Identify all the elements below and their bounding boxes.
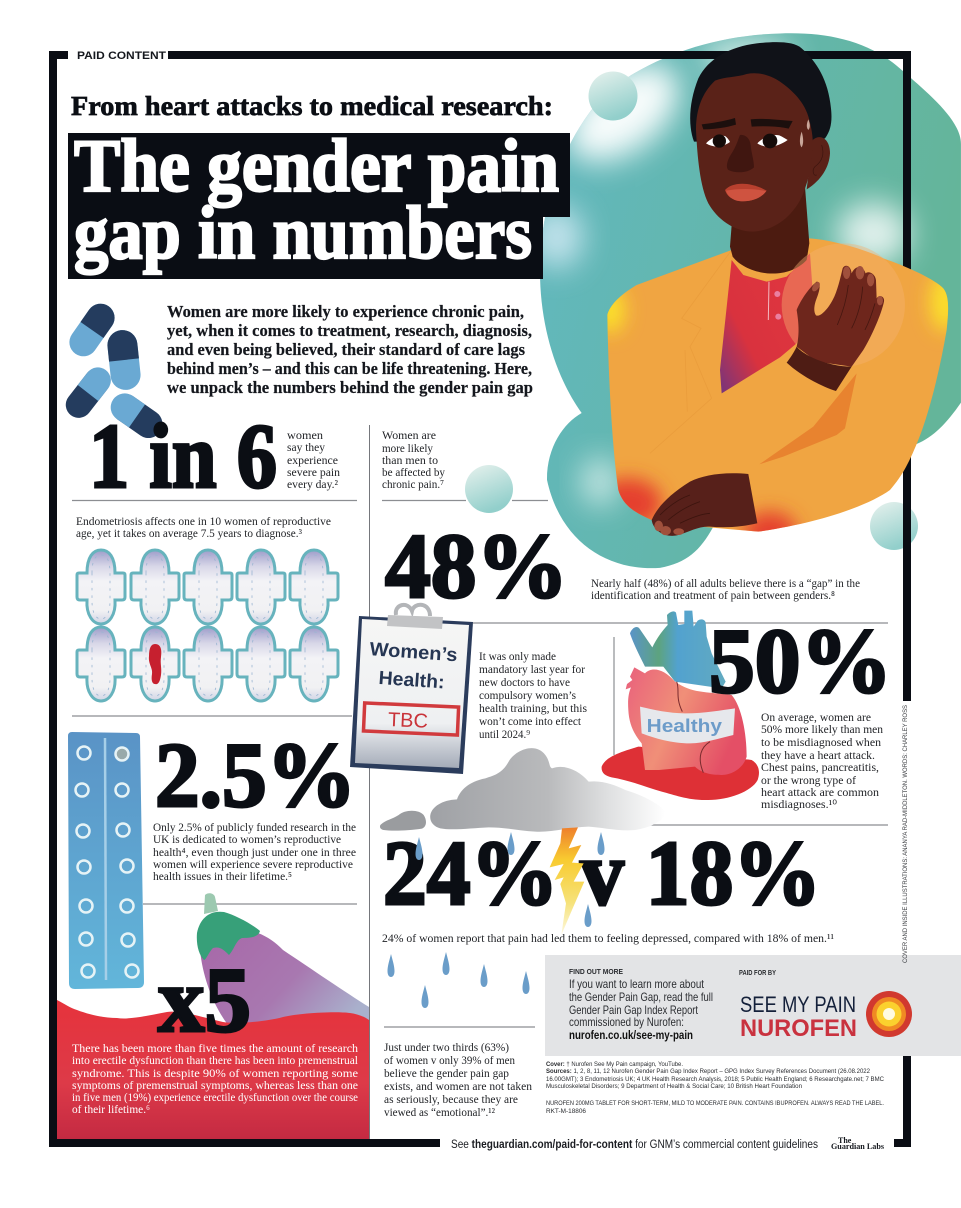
- text: erectile dysfunction research: of their lifetime.⁶: [72, 1104, 150, 1116]
- credit line: COVER AND INSIDE ILLUSTRATIONS: ANANYA RAD-MIDDLETON. WORDS: CHARLEY ROSS: [902, 705, 909, 963]
- find out more: the Gender Pain Gap, read the full: [569, 990, 713, 1004]
- sources: NUROFEN 200MG TABLET FOR SHORT-TERM, MILD TO MODERATE PAIN. CONTAINS IBUPROFEN. ALWAYS READ THE LABEL.: [546, 1100, 884, 1107]
- text: erectile dysfunction research: [72, 1043, 358, 1116]
- text: erectile dysfunction research: into erectile dysfunction than there has been into premenstrual: [72, 1055, 358, 1067]
- text: research funding: UK is dedicated to women’s reproductive: [153, 834, 341, 846]
- sources: [546, 1061, 884, 1115]
- text: mandatory training: until 2024.⁹: [479, 729, 530, 741]
- logo: guardian labs: Guardian Labs: [831, 1141, 885, 1151]
- icon: lightning bolt: [550, 827, 584, 935]
- paid for by: PAID FOR BY: [739, 968, 776, 977]
- text: mandatory training: [479, 651, 588, 741]
- eyes: [706, 135, 788, 147]
- icon: rain drops lower: [388, 952, 530, 1008]
- ear: [807, 137, 830, 189]
- face: [696, 73, 813, 232]
- stat text: women say they: women: [287, 430, 323, 442]
- find out more: Gender Pain Gap Index Report: [569, 1003, 699, 1017]
- icon: clipboard: [350, 605, 473, 774]
- text: nearly half: identification and treatment of pain between genders.⁸: [591, 590, 835, 602]
- text: research funding: health⁴, even though just under one in three: [153, 847, 356, 859]
- footer text: See theguardian.com/paid-for-content for GNM’s commercial content guidelines: [451, 1139, 818, 1151]
- text: research funding: Only 2.5% of publicly funded research in the: [153, 822, 356, 834]
- text: misdiagnosis: they have a heart attack.: [761, 750, 875, 762]
- sources: Sources: 1, 2, 8, 11, 12 Nurofen Gender Pain Gap Index Report – GPG Index Survey References Document (26.08.2022: [546, 1068, 870, 1075]
- glow and hands: [652, 243, 905, 536]
- text: mandatory training: mandatory last year for: [479, 664, 585, 676]
- vessels: [630, 611, 726, 688]
- text: belief in gap: exists, and women are not taken: [384, 1081, 532, 1093]
- sources: 16.00GMT); 3 Endometriosis UK; 4 UK Health Research Analysis, 2018; 5 Public Health England; 6 Researchgate.net; 7 BMC: [546, 1076, 884, 1083]
- find out more: commissioned by Nurofen:: [569, 1015, 684, 1029]
- title block: The gender pain: [74, 125, 559, 208]
- text: belief in gap: of women v only 39% of men: [384, 1055, 515, 1067]
- stat: 2.5%: 2.5%: [155, 724, 356, 826]
- text: erectile dysfunction research: syndrome. This is despite 90% of women reporting some: [72, 1068, 358, 1080]
- icon: rain drops upper: [416, 832, 604, 927]
- stat: 24% v 18%: 24% v 18%: [383, 822, 821, 924]
- title block: [68, 125, 570, 279]
- stat text: women say they: experience: [287, 455, 338, 467]
- text: research funding: health issues in their lifetime.⁵: [153, 871, 292, 883]
- upper hand: [797, 266, 884, 367]
- nose: [727, 135, 754, 172]
- text: research funding: women will experience severe reproductive: [153, 859, 353, 871]
- find out more: If you want to learn more about: [569, 977, 705, 991]
- paid content label: PAID CONTENT: [77, 50, 166, 62]
- find out more: FIND OUT MORE: [569, 967, 623, 976]
- icon: pills: [61, 298, 168, 444]
- text: chronic pain: than men to: [382, 455, 438, 467]
- stat: 48%: 48%: [385, 515, 568, 617]
- text: mandatory training: won’t come into effect: [479, 716, 582, 728]
- icon: sanitary pads: [77, 550, 338, 701]
- text: mandatory training: compulsory women’s: [479, 690, 577, 702]
- stat: x5: x5: [158, 949, 251, 1051]
- stat: 1 in 6: 1 in 6: [89, 405, 277, 507]
- text: mandatory training: It was only made: [479, 651, 556, 663]
- find out more: nurofen.co.uk/see-my-pain: [569, 1028, 693, 1042]
- logo: see my pain nurofen: NUROFEN: [740, 1015, 857, 1042]
- puddle: [602, 747, 759, 800]
- illustration: person: [595, 42, 960, 552]
- text: belief in gap: [384, 1042, 532, 1119]
- text: belief in gap: believe the gender pain gap: [384, 1068, 509, 1080]
- text: endometriosis: Endometriosis affects one in 10 women of reproductive: [76, 516, 331, 528]
- jacket: [607, 238, 948, 532]
- icon: heart with bandage: [602, 611, 759, 800]
- bandage: [640, 707, 735, 743]
- lower hand: [652, 473, 757, 536]
- icon: clipboard: Health:: [378, 668, 445, 693]
- logo: see my pain nurofen: SEE MY PAIN: [740, 992, 856, 1017]
- icon: storm cloud: [380, 748, 665, 832]
- text: chronic pain: be affected by: [382, 467, 445, 479]
- text: research funding: [153, 822, 356, 883]
- text: chronic pain: chronic pain.⁷: [382, 479, 444, 491]
- text: misdiagnosis: heart attack are common: [761, 787, 879, 799]
- shirt: [720, 253, 813, 393]
- sources: Musculoskeletal Disorders; 9 Department of Health & Social Care; 10 British Heart Foundation: [546, 1083, 802, 1090]
- heart body: [626, 667, 747, 775]
- icon: clipboard: Women’s: [369, 639, 458, 666]
- text: belief in gap: viewed as “emotional”.¹²: [384, 1107, 496, 1119]
- text: mandatory training: health training, but this: [479, 703, 588, 715]
- text: chronic pain: Women are: [382, 430, 436, 442]
- bubble: centre: [465, 465, 513, 513]
- stat: 50%: 50%: [709, 610, 892, 712]
- intro text: behind men’s – and this can be life threatening. Here,: [167, 359, 532, 378]
- icon: aubergine: [197, 893, 369, 1040]
- text: nearly half: [591, 578, 860, 602]
- text: misdiagnosis: On average, women are: [761, 712, 871, 724]
- logo: guardian labs: The: [838, 1136, 852, 1145]
- text: belief in gap: as seriously, because they are: [384, 1094, 518, 1106]
- intro text: Women are more likely to experience chronic pain,: [167, 302, 524, 321]
- text: nearly half: Nearly half (48%) of all adults believe there is a “gap” in the: [591, 578, 860, 590]
- stat text: women say they: [287, 430, 340, 491]
- stat text: women say they: say they: [287, 442, 325, 454]
- head: [690, 42, 831, 274]
- text: mandatory training: new doctors to have: [479, 677, 570, 689]
- text: misdiagnosis: Chest pains, pancreatitis,: [761, 762, 879, 774]
- icon: pill blister pack: [68, 732, 144, 989]
- sweat: [800, 119, 810, 147]
- stat text: women say they: severe pain: [287, 467, 340, 479]
- text: misdiagnosis: [761, 712, 883, 811]
- icon: clipboard: TBC: [387, 709, 428, 733]
- stat text: women say they: every day.²: [287, 479, 339, 491]
- find out more: [569, 967, 713, 1042]
- neck: [730, 187, 809, 274]
- illustration background: teal blob: [530, 33, 961, 568]
- panel: find out more and sponsor: [545, 955, 961, 1056]
- text: depression: 24% of women report that pain had led them to feeling depressed, compared with 18% of men.¹¹: [382, 933, 835, 945]
- text: endometriosis: age, yet it takes on average 7.5 years to diagnose.³: [76, 528, 303, 540]
- sources: RKT-M-18806: [546, 1108, 586, 1115]
- subtitle: From heart attacks to medical research:: [71, 91, 553, 121]
- bubble: lower right: [870, 502, 918, 550]
- intro text: and even being believed, their standard of care lags: [167, 340, 525, 359]
- sources: Cover: † Nurofen See My Pain campaign, YouTube.: [546, 1061, 683, 1068]
- text: misdiagnosis: 50% more likely than men: [761, 724, 883, 736]
- text: erectile dysfunction research: There has been more than five times the amount of research: [72, 1043, 358, 1055]
- icon: heart with bandage: Healthy: [647, 715, 723, 736]
- logo: see my pain nurofen: [740, 991, 912, 1042]
- intro text: yet, when it comes to treatment, research, diagnosis,: [167, 321, 532, 340]
- text: chronic pain: more likely: [382, 443, 433, 455]
- text: misdiagnosis: to be misdiagnosed when: [761, 737, 881, 749]
- mouth: [725, 184, 767, 201]
- bubble: top: [588, 72, 638, 120]
- hair: [690, 42, 831, 142]
- title block: gap in numbers: [74, 192, 532, 275]
- text: erectile dysfunction research: in five men (19%) experience erectile dysfunction over the course: [72, 1092, 358, 1104]
- text: endometriosis: [76, 516, 331, 540]
- text: misdiagnosis: or the wrong type of: [761, 775, 856, 787]
- text: chronic pain: [382, 430, 445, 491]
- panel: red wave: [57, 1000, 369, 1139]
- text: belief in gap: Just under two thirds (63%): [384, 1042, 509, 1054]
- logo: guardian labs: [831, 1136, 885, 1151]
- text: erectile dysfunction research: symptoms of premenstrual symptoms, whereas less than one: [72, 1080, 358, 1092]
- text: misdiagnosis: misdiagnoses.¹⁰: [761, 799, 837, 811]
- column divider: [368, 425, 370, 1139]
- eyebrows: [702, 118, 793, 129]
- intro text: [167, 302, 533, 397]
- intro text: we unpack the numbers behind the gender pain gap: [167, 378, 533, 397]
